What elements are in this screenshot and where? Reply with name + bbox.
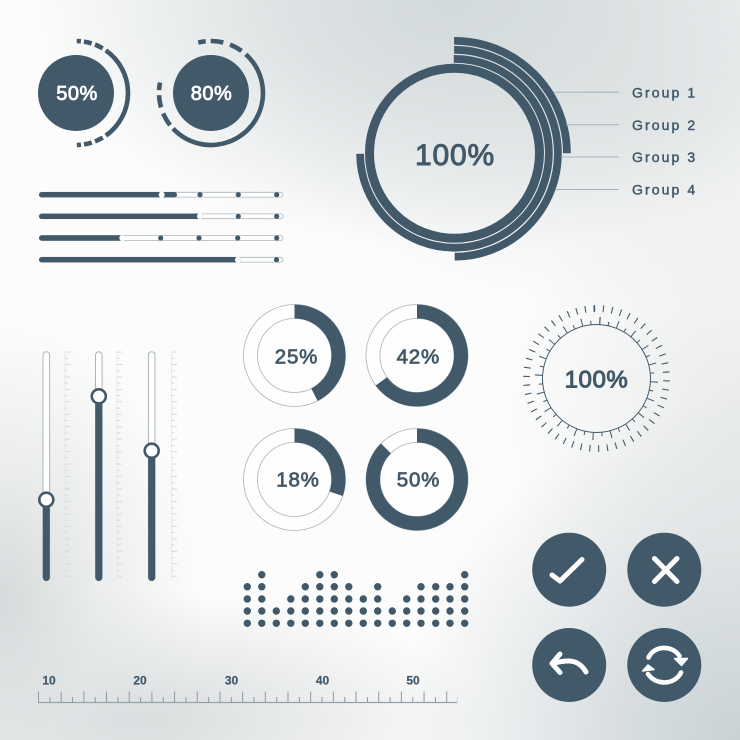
donut: 18% <box>244 428 346 530</box>
horizontal ruler scale: 20 <box>133 673 147 687</box>
slider ruler 3 <box>172 352 174 581</box>
progress bar 4 <box>39 257 283 263</box>
donut: 25%: 25% <box>275 345 318 368</box>
slider 1 <box>39 352 53 581</box>
donut: 50% <box>366 428 468 530</box>
legend: Group 2: Group 2 <box>632 117 697 133</box>
legend: groups <box>554 84 697 198</box>
horizontal ruler scale: 30 <box>225 673 238 687</box>
legend: Group 1: Group 1 <box>632 84 697 100</box>
concentric ring chart: 100% <box>415 139 495 172</box>
legend: Group 4: Group 4 <box>632 182 697 198</box>
horizontal ruler scale: 50 <box>406 673 420 687</box>
slider ruler 2 <box>117 352 120 581</box>
vertical sliders <box>39 352 174 581</box>
donut: 42% <box>366 304 468 406</box>
horizontal ruler scale <box>38 673 458 702</box>
slider ruler 1 <box>65 352 68 581</box>
gauge: 80% <box>148 30 274 156</box>
dot matrix chart <box>244 571 468 627</box>
button: back arrow <box>532 628 606 702</box>
gauge: 50% <box>24 41 128 145</box>
gauge: 50%: 50% <box>56 83 98 105</box>
slider 3 <box>145 352 159 581</box>
radial tick gauge: 100%: 100% <box>565 367 628 394</box>
button: check <box>532 533 606 607</box>
concentric ring chart <box>342 41 567 266</box>
horizontal ruler scale: 40 <box>316 673 329 687</box>
horizontal ruler scale: 10 <box>42 673 56 687</box>
legend: Group 2 <box>566 117 697 133</box>
legend: Group 3 <box>561 149 697 165</box>
button: refresh <box>627 628 701 702</box>
progress bar 3 <box>39 235 283 241</box>
progress bar 1 <box>39 192 283 198</box>
gauge: 80%: 80% <box>191 83 232 105</box>
progress bars <box>39 192 283 263</box>
donut: 18%: 18% <box>276 469 320 492</box>
button: close <box>627 533 701 607</box>
radial tick gauge: 100% <box>524 306 669 451</box>
donut: 50%: 50% <box>397 469 440 492</box>
donut: 25% <box>244 304 346 406</box>
legend: Group 3: Group 3 <box>632 149 697 165</box>
slider 2 <box>92 352 106 581</box>
progress bar 2 <box>39 213 283 219</box>
donut: 42%: 42% <box>397 345 440 368</box>
